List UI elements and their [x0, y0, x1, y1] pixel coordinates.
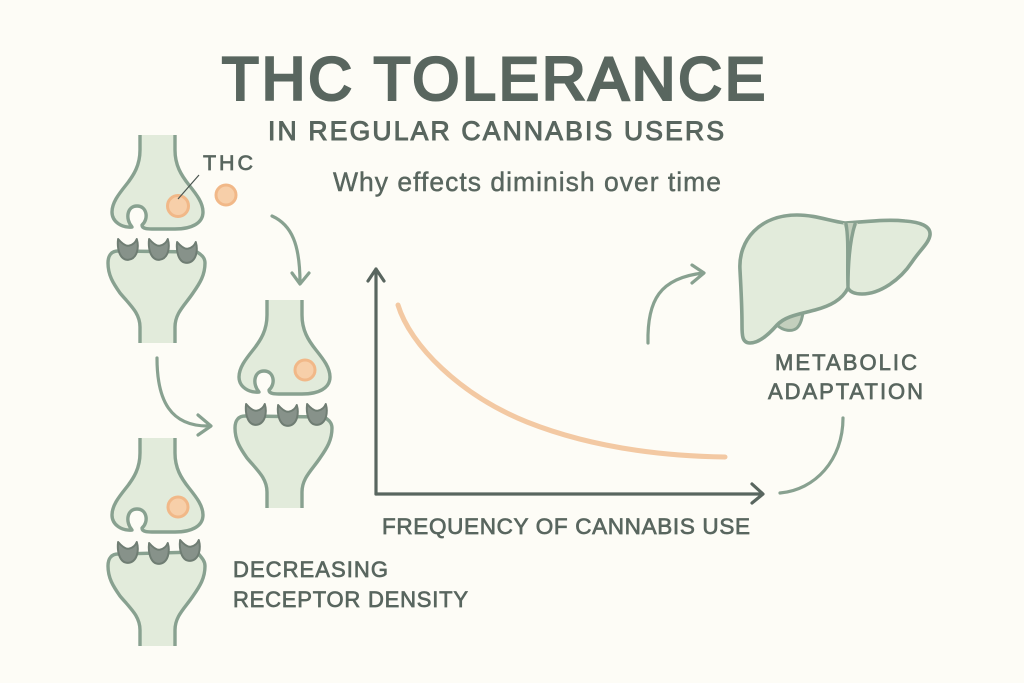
THC molecule bound	[168, 196, 188, 216]
postsynaptic neuron 3	[108, 552, 205, 646]
label: metabolic adaptation	[768, 350, 923, 404]
x axis	[376, 484, 763, 503]
label: metabolic adaptation: ADAPTATION	[768, 379, 923, 404]
postsynaptic neuron 1	[108, 251, 205, 343]
THC label: THC	[203, 151, 253, 175]
label: decreasing receptor density: RECEPTOR DENSITY	[233, 587, 468, 612]
synapse 1: high receptor density	[108, 135, 205, 343]
arrow: synapse 1 to synapse 3	[157, 358, 211, 435]
receptors 3	[118, 540, 200, 564]
synapse 3	[108, 438, 205, 646]
line chart	[368, 269, 763, 539]
postsynaptic neuron 2	[235, 416, 332, 508]
icon: liver	[740, 215, 930, 343]
gallbladder	[777, 313, 803, 330]
arrow: synapse 1 to synapse 2	[272, 216, 309, 284]
THC molecule free	[216, 185, 236, 205]
x axis label: FREQUENCY OF CANNABIS USE	[382, 514, 750, 539]
liver ligament	[843, 223, 858, 258]
label: decreasing receptor density	[233, 557, 468, 612]
tagline: Why effects diminish over time	[333, 167, 721, 197]
THC molecule 3	[168, 497, 188, 517]
presynaptic neuron 3	[112, 438, 203, 532]
subtitle: IN REGULAR CANNABIS USERS	[268, 116, 724, 146]
THC molecule 2	[295, 360, 315, 380]
THC leader line	[178, 175, 199, 199]
label: decreasing receptor density: DECREASING	[233, 557, 388, 582]
y axis	[368, 269, 384, 494]
tolerance curve	[398, 305, 725, 457]
receptors 1	[118, 239, 197, 263]
liver outline	[740, 215, 930, 343]
title: THC TOLERANCE	[222, 46, 765, 112]
receptors 2	[246, 404, 327, 426]
arrow: chart to liver	[648, 265, 704, 343]
presynaptic neuron 1	[112, 135, 203, 229]
arrow: x axis to label	[780, 418, 843, 493]
label: metabolic adaptation: METABOLIC	[775, 350, 917, 375]
liver lobe divider	[846, 224, 855, 288]
synapse 2	[235, 300, 332, 508]
presynaptic neuron 2	[239, 300, 330, 394]
